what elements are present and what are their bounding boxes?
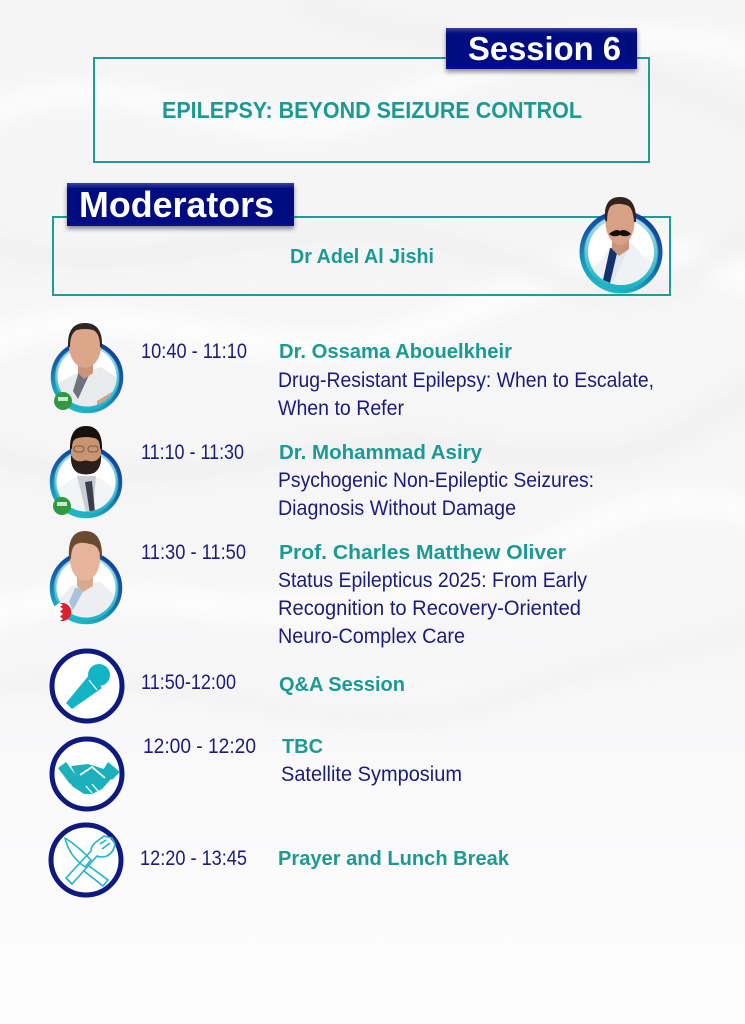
talk title: Psychogenic Non-Epileptic Seizures:: [278, 469, 594, 492]
panel: moderators box: [53, 217, 670, 295]
talk title: [278, 469, 594, 520]
badge: Session 6: Session 6: [468, 30, 621, 67]
time: 12:00 - 12:20: [143, 735, 256, 758]
portrait: Prof. Charles Matthew Oliver: [52, 531, 120, 622]
speaker row: Charles Matthew Oliver: [52, 531, 587, 648]
flag: Saudi Arabia: [54, 392, 72, 410]
agenda row: Q&A: [52, 651, 405, 721]
talk title: When to Refer: [278, 397, 404, 420]
flag: Saudi Arabia: [53, 497, 71, 515]
agenda row: satellite symposium: [52, 735, 462, 809]
icon: fork and knife: [51, 825, 121, 895]
moderator name: Dr Adel Al Jishi: [290, 246, 434, 268]
talk title: [278, 569, 587, 648]
talk title: [278, 369, 654, 420]
speaker name: Prof. Charles Matthew Oliver: [279, 542, 566, 564]
portrait: Dr. Mohammad Asiry: [52, 426, 120, 516]
speaker name: Dr. Ossama Abouelkheir: [279, 341, 512, 363]
talk title: Drug-Resistant Epilepsy: When to Escalate,: [278, 369, 654, 392]
talk title: Recognition to Recovery-Oriented: [278, 597, 581, 620]
label: Prayer and Lunch Break: [278, 848, 510, 870]
heading: session title: EPILEPSY: BEYOND SEIZURE CONTROL: [162, 97, 582, 123]
time: 11:10 - 11:30: [141, 441, 244, 464]
time: 11:30 - 11:50: [141, 541, 246, 564]
talk title: Neuro-Complex Care: [278, 625, 465, 648]
talk title: Status Epilepticus 2025: From Early: [278, 569, 587, 592]
panel: session title box: [94, 58, 649, 162]
agenda row: prayer and lunch: [51, 825, 510, 895]
time: 10:40 - 11:10: [141, 340, 247, 363]
description: Satellite Symposium: [281, 763, 462, 786]
talk title: Diagnosis Without Damage: [278, 497, 516, 520]
label: TBC: [282, 736, 323, 758]
speaker row: Mohammad Asiry: [52, 426, 594, 520]
speaker name: Dr. Mohammad Asiry: [279, 442, 483, 464]
badge: Moderators: Moderators: [79, 184, 274, 225]
time: 11:50-12:00: [141, 671, 236, 694]
label: Q&A Session: [279, 674, 405, 696]
time: 12:20 - 13:45: [140, 847, 247, 870]
speaker row: Ossama Abouelkheir: [53, 323, 654, 420]
flag: Bahrain: [53, 603, 71, 621]
portrait: moderator: [582, 197, 660, 292]
icon: microphone: [52, 651, 122, 721]
icon: handshake: [52, 739, 122, 809]
portrait: Dr. Ossama Abouelkheir: [53, 323, 121, 411]
